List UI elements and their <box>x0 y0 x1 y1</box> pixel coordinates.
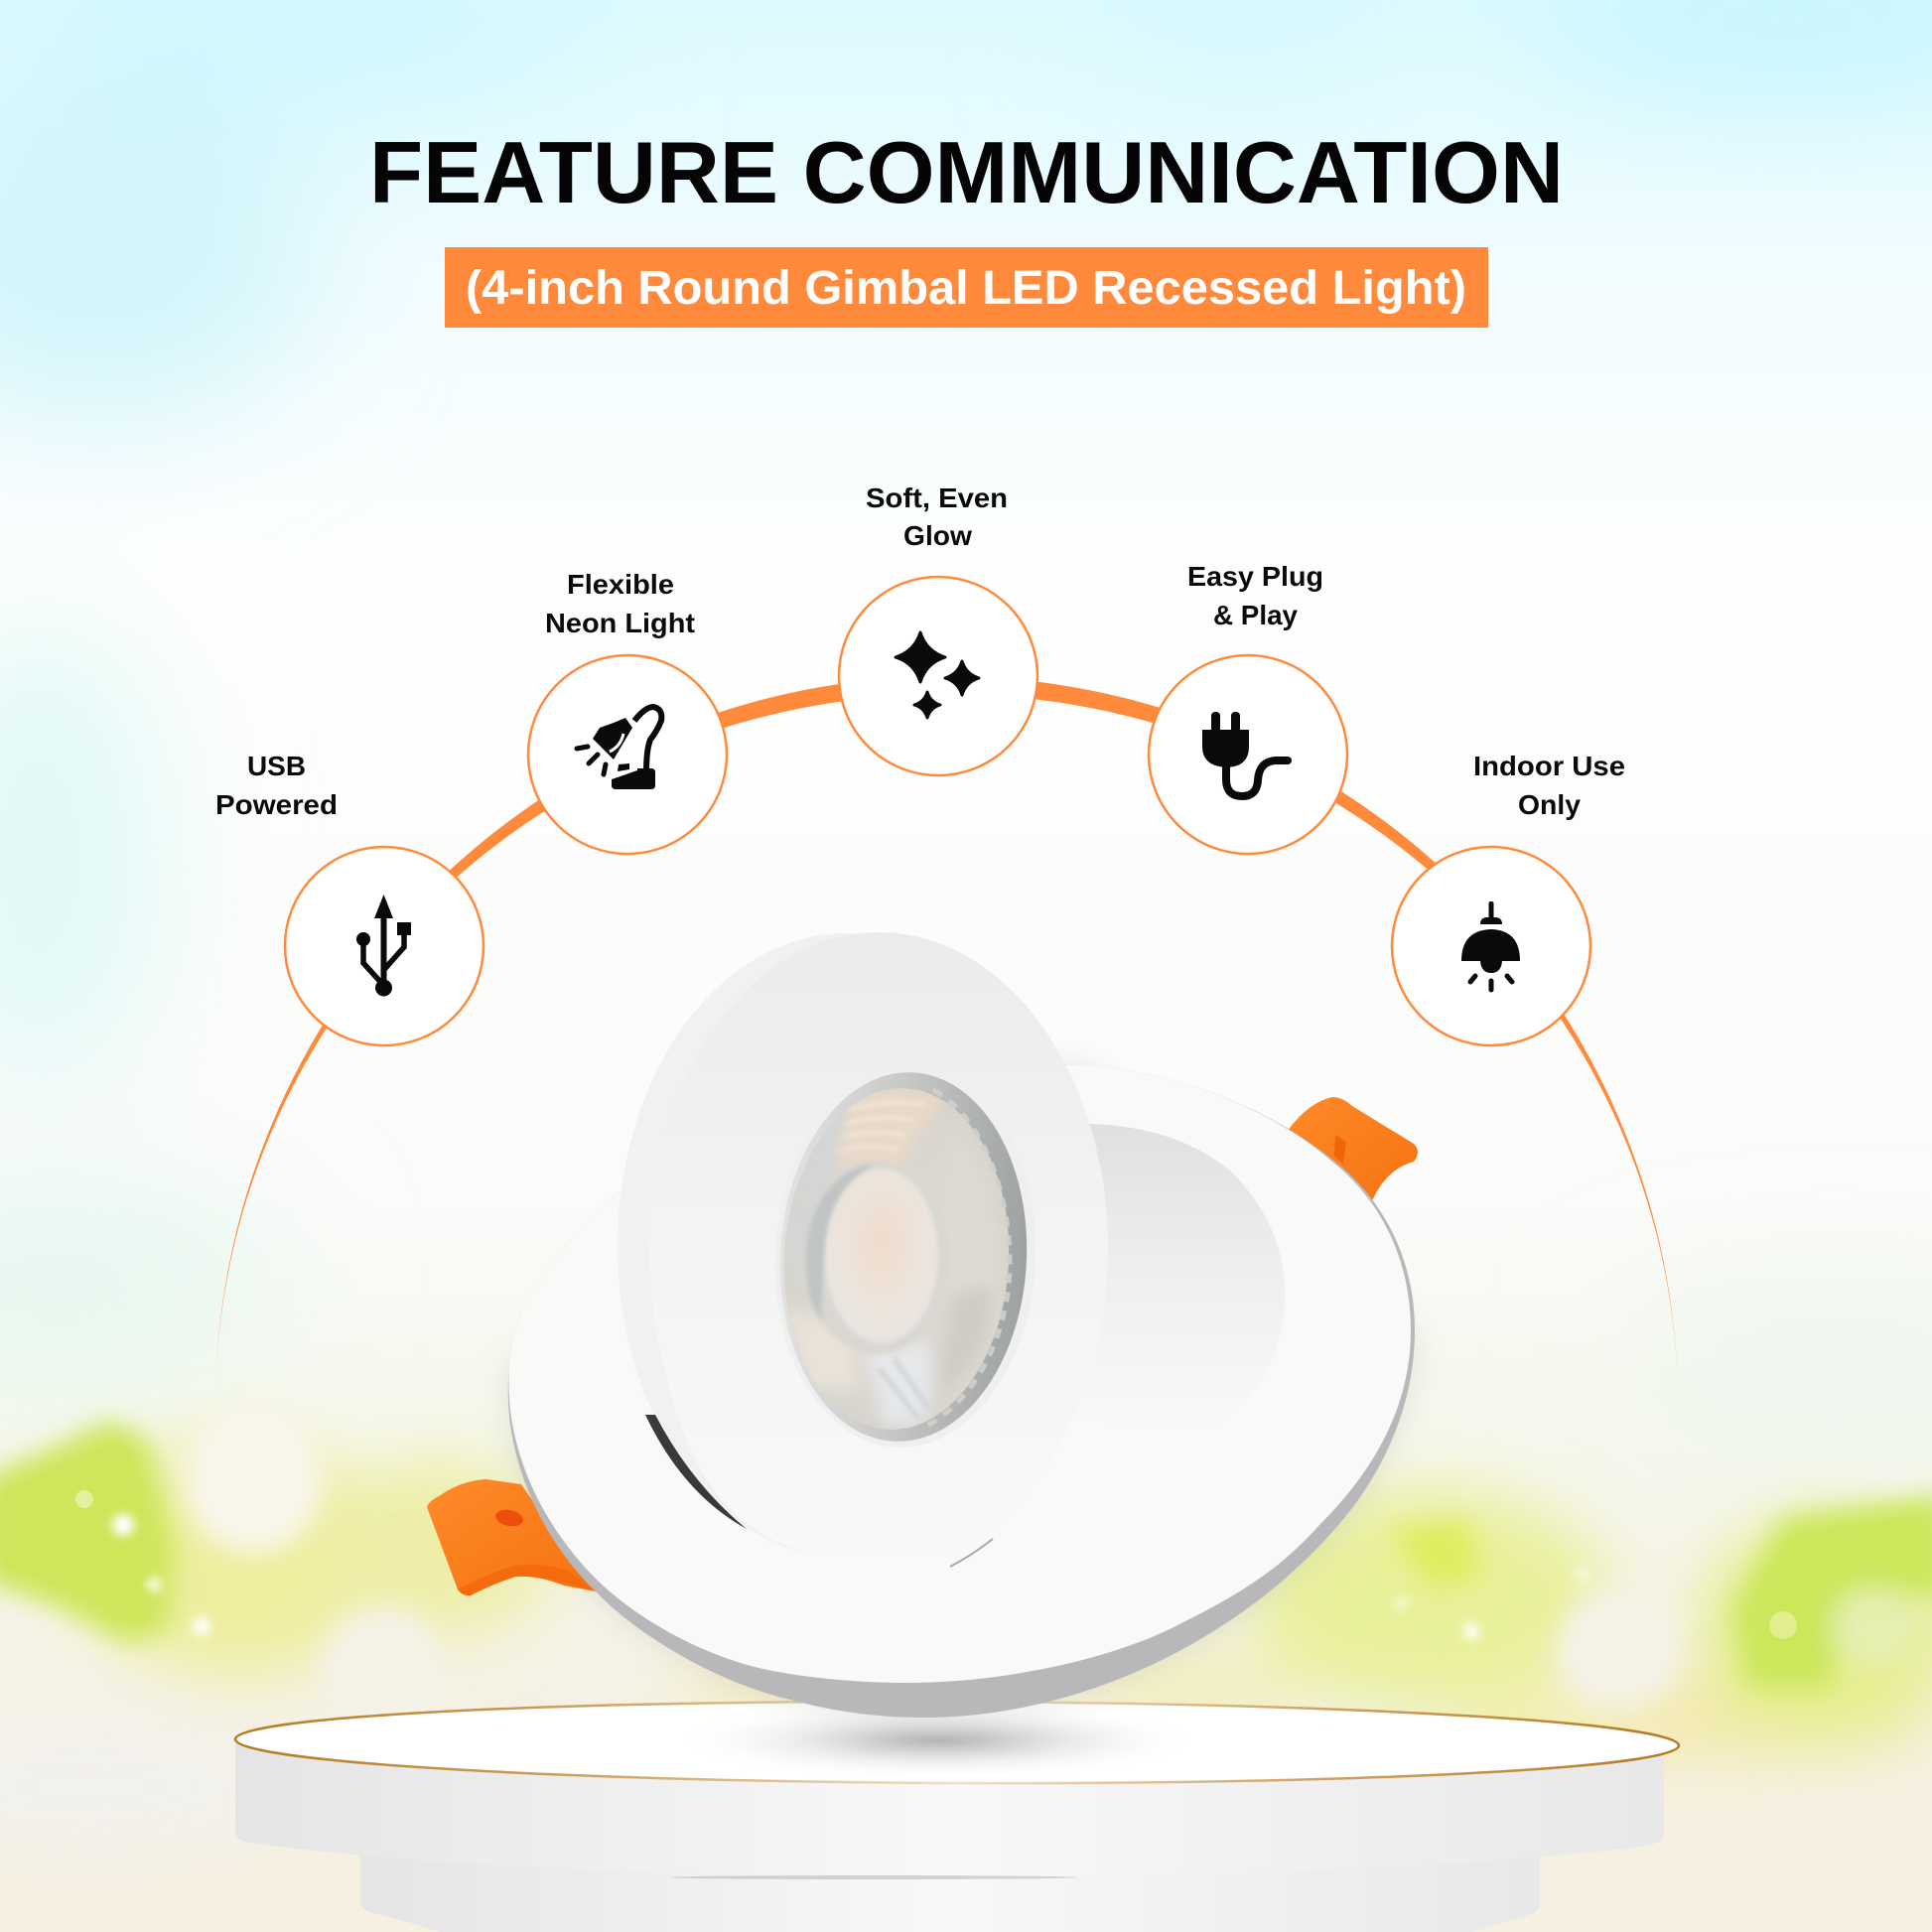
gimbal front face <box>649 932 1108 1567</box>
label: Powered <box>215 789 338 820</box>
icon: pendant lamp <box>1461 901 1520 990</box>
icon: desk lamp <box>577 707 661 789</box>
tooth waves on right side of band <box>923 1090 1010 1428</box>
icon: plug <box>1202 712 1288 796</box>
subtitle banner <box>445 247 1488 328</box>
LED lens <box>780 1072 1027 1442</box>
circle <box>285 847 483 1045</box>
orange clip left <box>427 1479 596 1595</box>
podium <box>235 1699 1679 1932</box>
label: Easy Plug <box>1187 561 1323 592</box>
feature: Easy Plug & Play <box>1149 561 1347 854</box>
podium lower tier <box>360 1847 1540 1932</box>
label: Indoor Use <box>1473 751 1625 781</box>
ring underside <box>508 1065 1415 1718</box>
label: Only <box>1518 789 1581 820</box>
circle <box>528 655 727 854</box>
outer rim and toothed band <box>765 1059 1045 1454</box>
feature: Flexible Neon Light <box>528 569 727 854</box>
podium upper tier <box>235 1743 1664 1876</box>
orange clip right <box>1287 1097 1418 1203</box>
circle <box>839 577 1037 775</box>
label: Neon Light <box>545 608 695 638</box>
lamp shadow on podium <box>670 1701 1206 1780</box>
circle <box>1392 847 1590 1045</box>
label: USB <box>247 751 306 781</box>
reflector facets <box>784 1087 1003 1425</box>
icon: usb <box>356 895 411 997</box>
podium top surface <box>235 1699 1679 1786</box>
dark gap under gimbal <box>645 1415 747 1529</box>
label: Glow <box>903 520 972 551</box>
circle <box>1149 655 1347 854</box>
title: FEATURE COMMUNICATION <box>369 123 1564 221</box>
feature: Soft, Even Glow <box>839 483 1037 775</box>
ring top surface <box>508 1065 1411 1683</box>
product: gimbal recessed light <box>427 932 1418 1718</box>
icon: sparkles <box>896 632 979 718</box>
gimbal back edge <box>618 933 1074 1559</box>
label: Soft, Even <box>866 483 1008 513</box>
drop shadow <box>508 1065 1415 1718</box>
tapered orange arc <box>215 676 1678 1405</box>
label: & Play <box>1213 600 1298 630</box>
LED emitter <box>825 1169 938 1343</box>
label: Flexible <box>567 569 674 600</box>
recess <box>1072 1124 1286 1430</box>
subtitle banner: (4-inch Round Gimbal LED Recessed Light) <box>466 262 1466 315</box>
LED surround <box>804 1162 949 1354</box>
feature: Indoor Use Only <box>1392 751 1625 1045</box>
feature: USB Powered <box>215 751 483 1045</box>
